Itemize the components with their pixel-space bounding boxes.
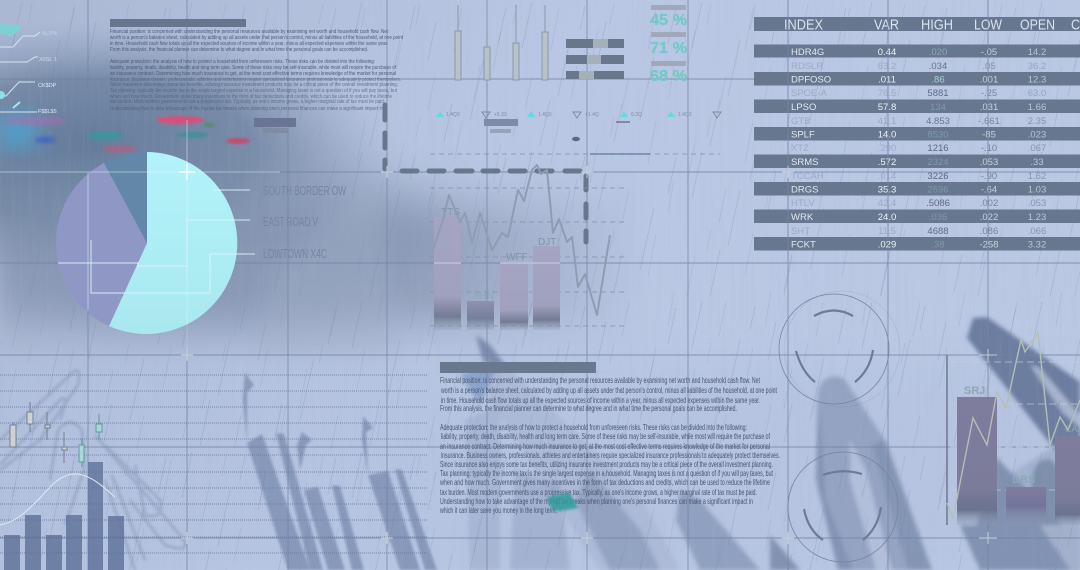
table names: SPLF [791, 130, 815, 140]
table column: HIGH: .034 [929, 61, 947, 72]
table column: VAR: 11.5 [878, 226, 896, 237]
table column: VAR: .290 [878, 143, 896, 154]
table column: VAR: 63.2 [878, 61, 896, 72]
table column: OPEN: 1.66 [1028, 102, 1046, 113]
body text: main paragraph: in time. Household cash flow totals up all the expected sources of income within a year, minus all expected expenses within the same year. [441, 395, 760, 405]
bars [957, 397, 997, 525]
trace labels: CK$DP [38, 83, 57, 89]
candlesticks: top centre [455, 5, 548, 80]
stacked range bars [566, 39, 624, 79]
table column: LOW: -.661 [978, 116, 1000, 127]
percentages: teal: 68 % [650, 68, 687, 85]
body text: main paragraph: Understanding how to take advantage of the myriad tax breaks when planning one's personal finances can make a significant impact in [440, 496, 753, 506]
body text: main paragraph: From this analysis, the financial planner can determine to what degree and in what time the personal goals can be accomplished. [440, 403, 737, 413]
table names [791, 47, 831, 250]
table column: OPEN [1028, 47, 1046, 250]
photo objects: pens pencils and paper clips [0, 317, 1080, 570]
table names: HTLV [791, 198, 815, 209]
line series [947, 333, 1080, 518]
body text: top paragraph: Understanding how to take advantage of the myriad tax breaks when planning one's personal finances can make a significant impact in [110, 106, 383, 112]
table column: VAR: 42.4 [878, 198, 896, 209]
bar labels [964, 385, 1080, 486]
table column: VAR: 24.0 [878, 212, 896, 223]
header row: INDEX [784, 16, 823, 34]
line series [432, 165, 610, 315]
white highlight on grid [434, 262, 560, 264]
body text: main paragraph: worth is a person's balance sheet, calculated by adding up all assets under that person's control, minus all liabilities of the household, at one point [440, 385, 777, 395]
table column: HIGH: 4688 [927, 226, 949, 237]
main paragraph block [439, 362, 780, 515]
ticker row: 1.4Q3 [678, 112, 692, 118]
table names: DPFOSO [791, 74, 831, 86]
header row [754, 16, 1080, 34]
table column: OPEN: 36.2 [1028, 61, 1046, 72]
table column: OPEN: 1.23 [1028, 212, 1046, 223]
table names: DRGS [791, 184, 818, 196]
table names: FCKT [791, 240, 816, 250]
table column: HIGH: 8530 [927, 130, 949, 140]
body text: top paragraph: tax burden. Most modern governments use a progressive tax. Typically, as one's income grows, a higher marginal rate of tax must be paid. [110, 99, 385, 105]
body text: top paragraph: Financial position: is concerned with understanding the personal resources available by examining net worth and household cash flow. Net [110, 29, 388, 35]
table column: HIGH: 5881 [927, 88, 949, 99]
bar labels: DBS [1012, 474, 1035, 486]
body text: top paragraph: Tax planning: typically the income tax is the single largest expense in a household. Managing taxes is not a question of if you will pay taxes, but [110, 88, 397, 94]
bar labels: SRJ [964, 385, 985, 397]
table column: HIGH: .5086 [926, 198, 950, 209]
pie legend labels: EAST ROAD V [263, 215, 318, 229]
pie legend labels [0, 184, 346, 261]
bar chart: lower right [947, 333, 1080, 525]
table column: LOW: .002 [980, 198, 998, 209]
table column: VAR: .014 [878, 171, 896, 182]
table column: LOW: .086 [980, 226, 998, 237]
table column: OPEN: 12.3 [1028, 74, 1046, 86]
body text: main paragraph: Financial position: is concerned with understanding the personal resources available by examining net worth and household cash flow. Net [440, 375, 760, 385]
axis [946, 355, 948, 525]
heading bar: main paragraph [440, 362, 596, 373]
table column: LOW: .053 [980, 157, 998, 168]
table column: LOW: -.64 [981, 184, 997, 196]
table column: VAR: 57.8 [878, 102, 896, 113]
body text: main paragraph: liability, property, death, disability, health and long term care. Some of these risks may be self-insurable, while most will require the purchase of [441, 431, 770, 441]
body text: top paragraph: Since insurance also enjoys some tax benefits, utilizing insurance investment products may be a critical piece of the overall investment planning. [110, 82, 398, 88]
table column: OPEN: .023 [1028, 130, 1046, 140]
body text: top paragraph: liability, property, death, disability, health and long term care. Some of these risks may be self-insurable, while most will require the purchase of [110, 65, 396, 71]
pencils: left group [243, 373, 437, 570]
dashed selection box [385, 105, 586, 242]
body text: top paragraph: when and how much. Government gives many incentives in the form of tax deductions and credits, which can be used to reduce the lifetime [109, 94, 392, 100]
pie legend labels: SOUTH BORDER OW [263, 184, 346, 198]
pen: centre large [816, 376, 932, 570]
slice: cyan [109, 152, 237, 334]
dark row stripes [754, 44, 1080, 250]
body text: main paragraph: Since insurance also enjoys some tax benefits, utilizing insurance investment products may be a critical piece of the overall investment planning. [440, 459, 773, 469]
bar labels: DJT [538, 237, 556, 248]
header row: VAR [874, 16, 899, 34]
colored glow streak [0, 116, 250, 152]
table names: HDR4G [791, 47, 824, 58]
percentages: teal: 45 % [650, 12, 687, 29]
table column: HIGH [926, 47, 950, 250]
table column: OPEN: .33 [1030, 157, 1044, 168]
header row: OPEN [1020, 16, 1055, 34]
table names: XTZ [791, 143, 809, 154]
table column: VAR: .011 [878, 74, 896, 86]
ticker row: 6.3Q [631, 112, 642, 118]
data table [754, 0, 1080, 260]
teal map fragment [0, 24, 22, 37]
percentages: teal: 71 % [650, 40, 687, 57]
table column: LOW: .031 [980, 102, 998, 113]
body text: main paragraph: Adequate protection: the analysis of how to protect a household from unforeseen risks. These risks can be divided into the following: [440, 422, 747, 432]
pen: upper right dark [967, 317, 1080, 570]
table column: VAR: 0.44 [878, 47, 896, 58]
body text: top paragraph: worth is a person's balance sheet, calculated by adding up all assets under that person's control, minus all liabilities of the household, at one point [109, 35, 403, 41]
ticker row: 1.4Q3 [538, 112, 552, 118]
bar labels: TTS [441, 207, 460, 218]
top paragraph block [109, 19, 403, 112]
body text: main paragraph [439, 375, 780, 515]
table column: VAR: 41.1 [878, 116, 896, 127]
slice: lavender [56, 163, 147, 326]
bell curve [0, 474, 115, 525]
trace labels [38, 31, 57, 115]
table names: GTB [791, 116, 811, 127]
table column: HIGH: .020 [929, 47, 947, 58]
cross marker on pie [179, 164, 195, 180]
trace labels: F$$L$5 [38, 109, 57, 115]
table column: VAR: 35.3 [878, 184, 896, 196]
table column: LOW: -.10 [981, 143, 997, 154]
body text: top paragraph: in time. Household cash flow totals up all the expected sources of income within a year, minus all expected expenses within the same year. [110, 41, 388, 47]
pie legend labels: LOWTOWN X4C [263, 247, 327, 261]
pie legend labels: R B3 [0, 190, 24, 202]
background: blurred desk photo [0, 0, 604, 410]
table names: TCCAH [791, 171, 824, 182]
table column: OPEN: 1.03 [1028, 184, 1046, 196]
table column: LOW [978, 47, 1000, 250]
candlesticks [10, 402, 102, 467]
table column: OPEN: 63.0 [1028, 88, 1046, 99]
table column: LOW: -.05 [981, 47, 997, 58]
table column: OPEN: 2.35 [1028, 116, 1046, 127]
ticker row: +1.4Q [585, 112, 599, 118]
dashed guides [950, 362, 1080, 490]
dashed guide lines [430, 154, 720, 326]
table column: LOW: .05 [982, 61, 996, 72]
small grey bars under top paragraph [254, 118, 296, 133]
table column: HIGH: 2596 [927, 184, 949, 196]
table column: VAR [878, 47, 896, 250]
circular gauges [779, 291, 900, 562]
table names: LPSO [791, 102, 816, 113]
bar labels: YHN [473, 291, 494, 302]
bars [4, 462, 124, 570]
paper clips: left bottom [0, 370, 185, 570]
table names: SRMS [791, 157, 818, 168]
body text: main paragraph: when and how much. Government gives many incentives in the form of tax deductions and credits, which can be used to reduce the lifetime [439, 477, 770, 487]
ticker row: 1.4Q3 [446, 112, 460, 118]
table column: HIGH: .86 [931, 74, 945, 86]
bars [434, 217, 461, 330]
table column: OPEN: .067 [1028, 143, 1046, 154]
table column: LOW: .001 [980, 74, 998, 86]
body text: main paragraph: insurance. Business owners, professionals, athletes and entertainers require specialized insurance professionals to adequately protect themselves. [441, 450, 780, 460]
table column: VAR: 76.5 [878, 88, 896, 99]
trace labels: ALP% [42, 31, 57, 37]
header row: HIGH [921, 16, 953, 34]
bar labels [441, 207, 556, 302]
table column: OPEN: 1.62 [1028, 171, 1046, 182]
body text: main paragraph: tax burden. Most modern governments use a progressive tax. Typically, as one's income grows, a higher marginal rate of tax must be paid. [440, 487, 757, 497]
table column: LOW: -258 [979, 240, 999, 250]
slice: dark blue [104, 152, 147, 243]
gauge: lower [788, 452, 898, 562]
traces [0, 32, 40, 112]
lower left chart [0, 402, 124, 570]
ticker row [436, 111, 721, 118]
table column: LOW: .022 [980, 212, 998, 223]
table names: SHT [791, 226, 810, 237]
bar chart: centre [430, 154, 720, 330]
body text: main paragraph: which it can later save you money in the long term. [439, 505, 557, 515]
table names: RDSLR [791, 61, 823, 72]
teal smudge over text [547, 493, 578, 511]
table column: LOW: -.90 [981, 171, 997, 182]
dotted ruled lines: lower left [0, 375, 427, 553]
leader lines over pie [0, 120, 280, 350]
table column: HIGH: 1216 [927, 143, 949, 154]
small blobs near ticker [484, 119, 650, 155]
body text: top paragraph: From this analysis, the financial planner can determine to what degree and in what time the personal goals can be accomplished. [110, 47, 368, 53]
table column: HIGH: .38 [931, 240, 945, 250]
table column: HIGH: 3226 [927, 171, 949, 182]
body text: main paragraph: Tax planning: typically the income tax is the single largest expense in a household. Managing taxes is not a question of if you will pay taxes, but [440, 468, 773, 478]
body text: top paragraph [109, 29, 403, 112]
header row: LOW [974, 16, 1003, 34]
ticker row: +5.33 [494, 112, 507, 118]
table column: HIGH: 134 [930, 102, 946, 113]
cross markers at grid intersections [181, 166, 997, 544]
table column: HIGH: .036 [929, 212, 947, 223]
table column: OPEN: .066 [1028, 226, 1046, 237]
body text: main paragraph: an insurance contract. Determining how much insurance to get, at the most cost effective terms requires knowledge of the market for personal [440, 441, 770, 451]
percentages: teal [650, 5, 687, 85]
gauge: upper [779, 291, 900, 407]
trace labels: X0SL 1 [39, 57, 57, 63]
table column: HIGH: 4.853 [926, 116, 950, 127]
pie chart [0, 120, 280, 350]
table column: OPEN: .053 [1028, 198, 1046, 209]
line labels: top left [0, 24, 57, 115]
body text: top paragraph: Adequate protection: the analysis of how to protect a household from unforeseen risks. These risks can be divided into the following: [110, 59, 375, 65]
bar labels: WFF [506, 252, 528, 263]
body text: top paragraph: insurance. Business owners, professionals, athletes and entertainers require specialized insurance professionals to adequately protect themselves. [110, 77, 401, 83]
table column: VAR: .572 [878, 157, 896, 168]
body text: top paragraph: an insurance contract. Determining how much insurance to get, at the most cost effective terms requires knowledge of the market for personal [110, 71, 396, 77]
pen: lower right [960, 457, 1080, 570]
pen: bottom centre group [460, 335, 800, 570]
table column: VAR: .029 [878, 240, 896, 250]
table column: LOW: -85 [982, 130, 996, 140]
table column: LOW: -.25 [981, 88, 997, 99]
table names: SPOE-A [791, 88, 828, 99]
table grid overlay [788, 0, 988, 260]
table column: HIGH: 2324 [927, 157, 949, 168]
table names: WRK [791, 212, 814, 223]
table column: OPEN: 3.32 [1028, 240, 1046, 250]
table column: VAR: 14.0 [878, 130, 896, 140]
table column: OPEN: 14.2 [1028, 47, 1046, 58]
heading bar: top paragraph [110, 19, 246, 27]
